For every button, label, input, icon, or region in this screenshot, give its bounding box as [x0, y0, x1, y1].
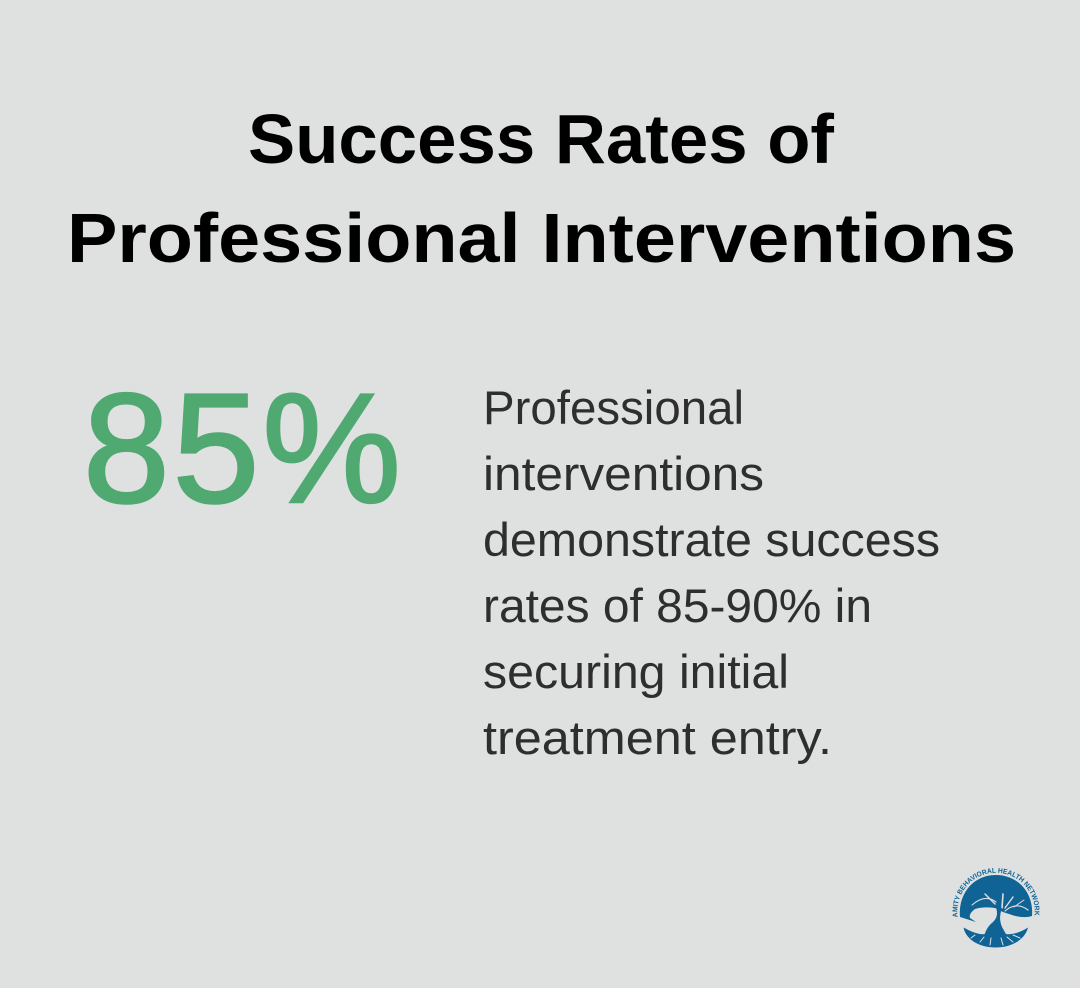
logo: Amity Behavioral Health Network [952, 868, 1040, 948]
title: Success Rates of [248, 100, 835, 178]
description text: interventions [483, 447, 764, 500]
description text: rates of 85-90% in [483, 579, 872, 632]
description text [483, 381, 940, 764]
description text: demonstrate success [483, 513, 940, 566]
description text: Professional [483, 381, 744, 434]
logo root lines [971, 935, 1020, 945]
big statistic: 85%: 85% [83, 362, 401, 536]
logo ring text: AMITY BEHAVIORAL HEALTH NETWORK [952, 868, 1040, 917]
description text: treatment entry. [483, 711, 832, 764]
title [67, 100, 1016, 277]
logo tree canopy [960, 875, 1032, 922]
logo roots bowl [964, 928, 1028, 948]
description text: securing initial [483, 645, 789, 698]
title: Professional Interventions [67, 199, 1016, 277]
logo trunk [984, 907, 1007, 936]
logo tree branches [972, 894, 1028, 911]
